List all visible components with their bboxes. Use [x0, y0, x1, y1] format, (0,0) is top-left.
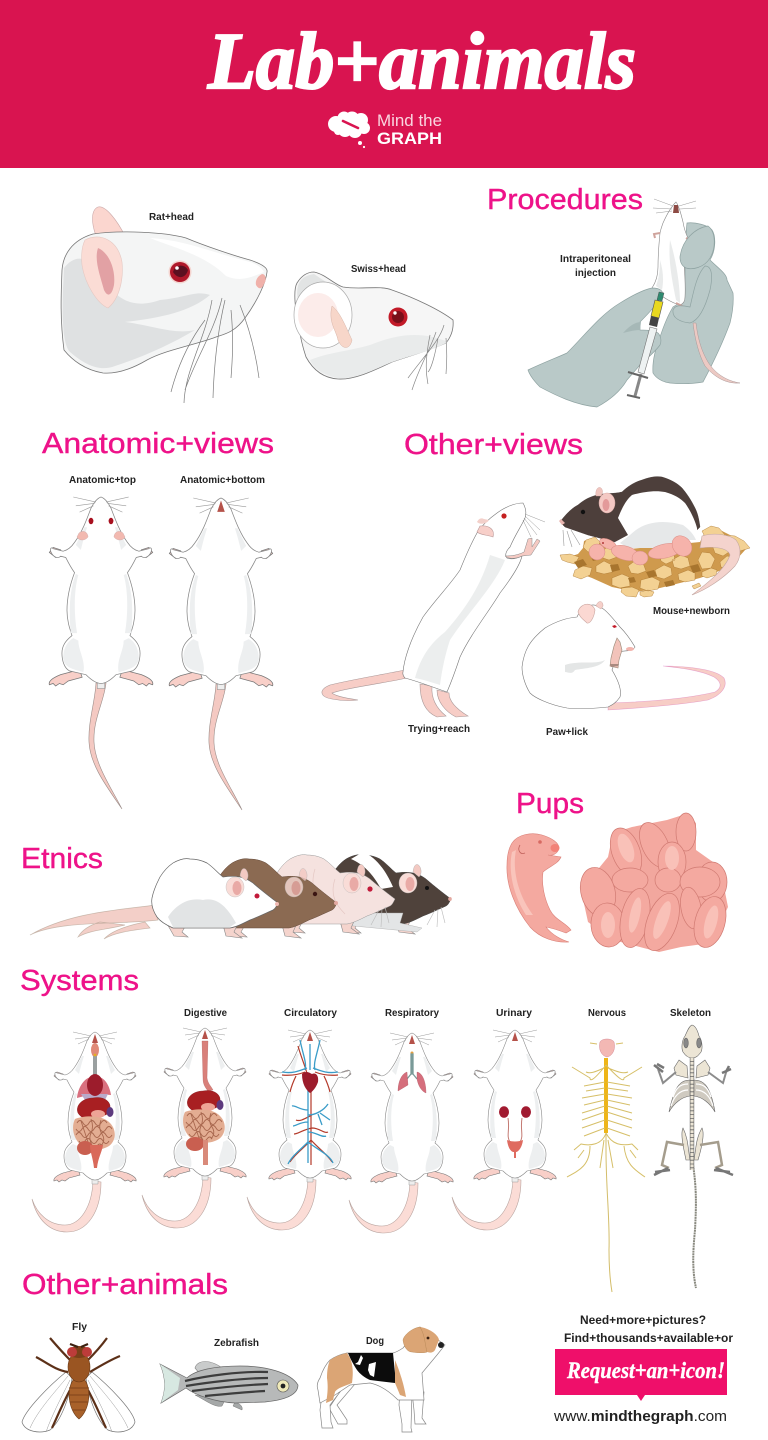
mouse tail	[693, 323, 740, 383]
dog legs	[320, 1384, 426, 1432]
illustration: rat licking paw	[522, 602, 725, 710]
white rat tails	[30, 905, 158, 939]
left glove	[528, 288, 663, 407]
label: Nervous: Nervous	[588, 1008, 626, 1019]
illustration: rat trying to reach	[322, 503, 545, 717]
label: Intraperitoneal injection: Intraperitoneal	[560, 254, 631, 265]
heading: Systems: Systems	[20, 965, 139, 997]
label: Swiss head: Swiss+head	[351, 264, 406, 275]
illustration: nervous system	[567, 1039, 645, 1292]
brown rat	[211, 859, 338, 938]
heading: Other views: Other+views	[404, 429, 583, 461]
text: need more pictures	[564, 1313, 733, 1345]
website url: www.mindthegraph.com	[553, 1408, 727, 1425]
illustration: zebrafish	[160, 1362, 298, 1410]
illustration: Swiss mouse head	[294, 272, 453, 390]
label: Digestive: Digestive	[184, 1008, 227, 1019]
label: Zebrafish: Zebrafish	[214, 1338, 259, 1349]
illustration: rat head	[61, 207, 267, 403]
heading: Etnics: Etnics	[21, 843, 103, 875]
illustration: anatomic bottom rat	[169, 498, 273, 810]
label: Respiratory: Respiratory	[385, 1008, 439, 1019]
label: Circulatory: Circulatory	[284, 1008, 337, 1019]
illustration: fly	[22, 1338, 135, 1432]
text: need more pictures: Find+thousands+available+or	[564, 1331, 733, 1345]
illustration: digestive system rat	[142, 1028, 246, 1228]
illustration: rat with all organs	[32, 1032, 136, 1232]
illustration: mouse with newborn pups	[559, 477, 750, 597]
illustration: single pup	[507, 834, 571, 942]
illustration: skeleton	[654, 1025, 733, 1288]
label: Urinary: Urinary	[496, 1008, 532, 1019]
illustration: pile of pups	[575, 813, 731, 955]
label: Anatomic bottom: Anatomic+bottom	[180, 475, 265, 486]
button: Request an icon	[555, 1349, 727, 1401]
illustration: circulatory system rat	[247, 1030, 351, 1230]
dark hooded rat	[325, 852, 452, 934]
label: Paw lick: Paw+lick	[546, 727, 588, 738]
label: Intraperitoneal injection	[560, 254, 631, 279]
heading: Anatomic views: Anatomic+views	[42, 428, 274, 460]
illustration: intraperitoneal injection	[528, 199, 740, 407]
mouse body	[652, 202, 688, 305]
button: Request an icon: Request+an+icon!	[566, 1358, 725, 1383]
newborn pups	[589, 532, 696, 565]
illustration: dog	[317, 1327, 445, 1432]
logo: Mind the Graph: GRAPH	[377, 129, 442, 148]
white rat	[152, 859, 279, 938]
glove fingers	[673, 226, 714, 323]
mother dark coat	[560, 477, 700, 542]
mother tail	[692, 534, 740, 595]
logo: Mind the Graph: Mind the	[377, 111, 442, 130]
right glove	[653, 223, 733, 384]
label: Mouse newborn: Mouse+newborn	[653, 606, 730, 617]
illustration: ethnic rat strains	[30, 852, 452, 939]
label: Rat head: Rat+head	[149, 212, 194, 223]
illustration: anatomic top rat	[49, 497, 153, 809]
dog body	[317, 1327, 445, 1403]
syringe	[627, 292, 664, 398]
label: Anatomic top: Anatomic+top	[69, 475, 136, 486]
text: need more pictures: Need+more+pictures?	[580, 1313, 706, 1327]
wood shavings	[560, 526, 750, 597]
title: Lab+animals	[207, 18, 636, 106]
header banner	[0, 0, 768, 168]
heading: Other animals: Other+animals	[22, 1269, 228, 1301]
illustration: respiratory system rat	[349, 1033, 453, 1233]
heading: Procedures: Procedures	[487, 184, 643, 216]
label: Skeleton: Skeleton	[670, 1008, 711, 1019]
label: Dog: Dog	[366, 1336, 384, 1347]
hairless rat	[269, 855, 395, 934]
label: Fly: Fly	[72, 1322, 87, 1333]
logo: Mind the Graph	[328, 111, 442, 148]
mother white coat	[615, 491, 698, 548]
label: Intraperitoneal injection: injection	[575, 268, 616, 279]
illustration: urinary system rat	[452, 1030, 556, 1230]
label: Trying reach: Trying+reach	[408, 724, 470, 735]
heading: Pups: Pups	[516, 788, 584, 820]
